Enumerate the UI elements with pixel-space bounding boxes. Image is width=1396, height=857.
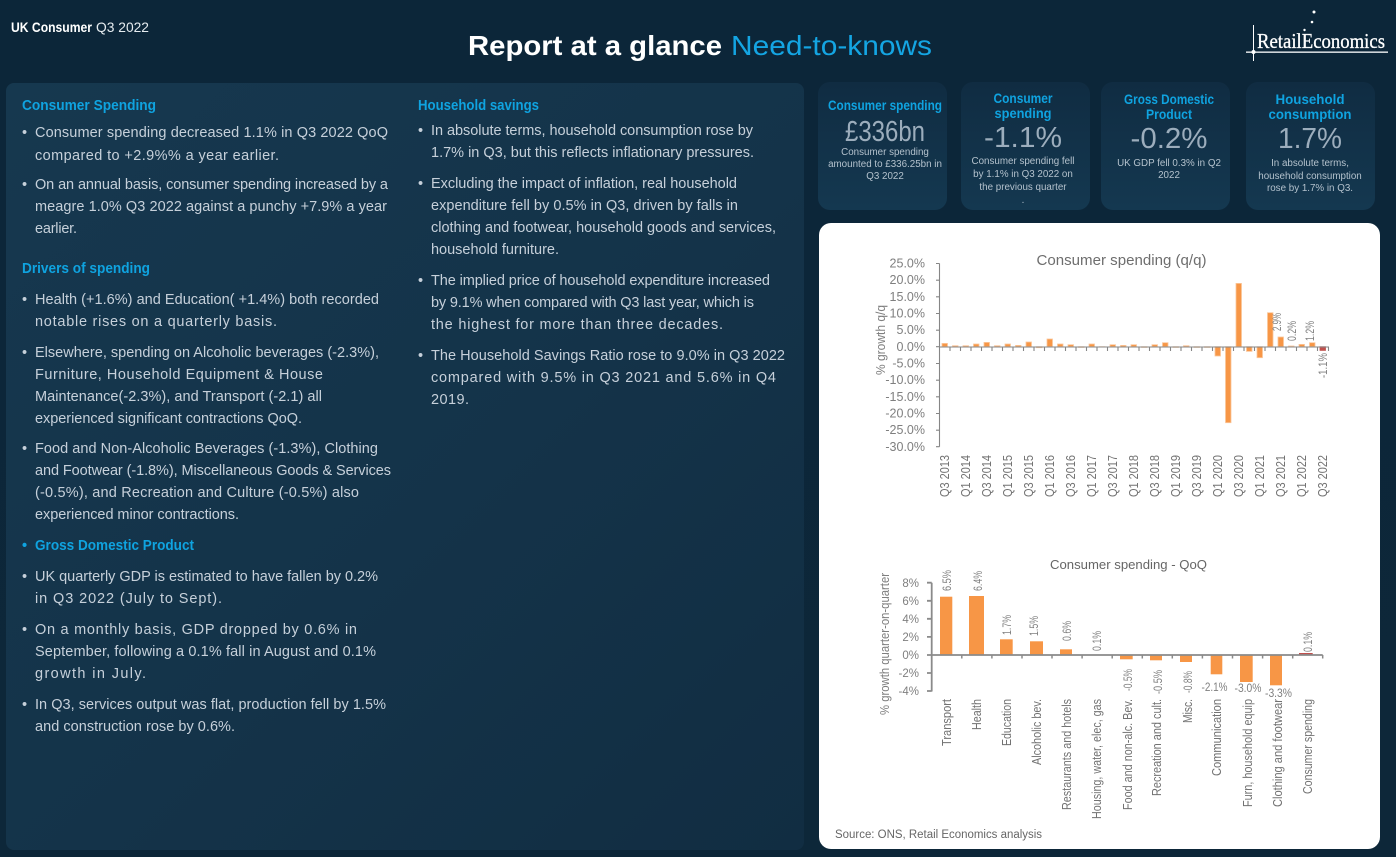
logo: Retail Economics: [1246, 10, 1388, 61]
data labels: 0.2%: [1285, 321, 1299, 341]
data labels: -0.8%: [1181, 671, 1195, 693]
heading: consumer spending: Consumer Spending: [22, 98, 156, 114]
text: spending quarterly: •: [22, 125, 27, 141]
y axis labels: -25.0%: [885, 423, 925, 437]
y axis title: % growth q/q: [873, 305, 888, 375]
y axis labels: 15.0%: [890, 290, 925, 304]
chart title: Consumer spending (q/q): [1036, 252, 1206, 269]
text: spending annual: •: [22, 177, 27, 193]
y axis labels: 0.0%: [896, 340, 925, 354]
card: household consumption: 1.7%: [1278, 123, 1342, 155]
axes: [936, 264, 1329, 447]
text: services output: In Q3, services output was flat, production fell by 1.5%: [35, 697, 386, 713]
card: consumer spending value: Q3 2022: [866, 171, 904, 182]
text: contractions: [22, 345, 379, 427]
text: services output: and construction rose by 0.6%.: [35, 719, 235, 735]
x axis labels: Q3 2018: [1147, 455, 1162, 497]
card: consumer spending growth: Consumer spending fell: [972, 156, 1074, 167]
data labels: 2.9%: [1270, 313, 1284, 331]
x axis labels: [937, 455, 1330, 497]
text: contractions: •: [22, 345, 27, 361]
text: health and education: •: [22, 292, 27, 308]
data labels: 1.7%: [1000, 615, 1014, 635]
text: savings ratio: •: [418, 348, 423, 364]
text: savings ratio: 2019.: [431, 392, 469, 408]
text: quarterly GDP: UK quarterly GDP is estimated to have fallen by 0.2%: [35, 569, 378, 585]
panel: charts: [819, 223, 1380, 849]
report label: [11, 19, 149, 35]
data labels: 1.2%: [1303, 321, 1317, 341]
card: household consumption: [1246, 82, 1375, 210]
text: quarterly GDP: •: [22, 569, 27, 585]
card: consumer spending value: [818, 82, 947, 210]
y axis labels: 2%: [902, 632, 919, 644]
card: consumer spending growth: the previous quarter: [979, 182, 1067, 193]
card: household consumption: In absolute terms,: [1271, 158, 1349, 169]
text: quarterly GDP: in Q3 2022 (July to Sept).: [35, 591, 222, 607]
category labels: Clothing and footwear: [1270, 698, 1285, 807]
text: implied price: [418, 273, 770, 333]
text: contractions: Maintenance(-2.3%), and Transport (-2.1) all: [35, 389, 322, 405]
y axis labels: 6%: [902, 596, 919, 608]
card: household consumption: rose by 1.7% in Q3.: [1267, 183, 1353, 194]
text: monthly GDP: September, following a 0.1% fall in August and 0.1%: [35, 644, 376, 660]
data labels: -3.0%: [1234, 681, 1262, 695]
card: GDP: [1101, 82, 1230, 210]
category labels: Furn, household equip: [1240, 699, 1255, 807]
x axis labels: Q3 2019: [1189, 455, 1204, 497]
text: absolute consumption: In absolute terms, household consumption rose by: [431, 123, 754, 139]
text: spending quarterly: compared to +2.9%% a year earlier.: [35, 148, 279, 164]
text: health and education: [22, 292, 379, 330]
title: Report at a glance: [468, 30, 722, 61]
y axis title: % growth quarter-on-quarter: [878, 573, 892, 715]
text: minor contractions: [22, 441, 391, 523]
text: real expenditure: Excluding the impact of inflation, real household: [431, 176, 737, 192]
card: consumer spending growth: [961, 82, 1090, 210]
text: minor contractions: Food and Non-Alcoholic Beverages (-1.3%), Clothing: [35, 441, 378, 457]
text: spending annual: earlier.: [35, 221, 77, 237]
title: [468, 30, 932, 61]
x axis labels: Q1 2014: [958, 455, 973, 497]
y axis labels: [899, 578, 919, 698]
y axis labels: -4%: [899, 686, 919, 698]
card: consumer spending growth: by 1.1% in Q3 2022 on: [973, 169, 1073, 180]
card: household consumption: consumption: [1268, 106, 1352, 122]
y axis labels: 8%: [902, 578, 919, 590]
text: monthly GDP: [22, 622, 376, 682]
heading: gross domestic product: •: [22, 538, 27, 554]
card: GDP: -0.2%: [1130, 123, 1208, 155]
card: household consumption: Household: [1276, 91, 1344, 107]
axes: [927, 583, 1323, 692]
category labels: Transport: [939, 699, 954, 746]
category labels: Recreation and cult.: [1149, 699, 1164, 796]
panel: report text: [6, 83, 804, 850]
title: Need-to-knows: [731, 30, 932, 61]
y axis labels: 20.0%: [890, 273, 925, 287]
category labels: Health: [969, 699, 984, 730]
y axis labels: 10.0%: [890, 306, 925, 320]
text: minor contractions: •: [22, 441, 27, 457]
card: consumer spending value: Consumer spending: [841, 147, 929, 158]
y axis labels: 0%: [902, 650, 919, 662]
data labels: -1.1%: [1316, 353, 1330, 378]
x axis labels: Q1 2017: [1084, 455, 1099, 497]
x axis labels: Q3 2016: [1063, 455, 1078, 497]
category labels: [939, 698, 1315, 819]
data labels: [1270, 313, 1330, 378]
text: contractions: experienced significant contractions QoQ.: [35, 411, 302, 427]
x axis labels: Q3 2020: [1231, 455, 1246, 497]
data labels: -2.1%: [1202, 680, 1228, 694]
card: consumer spending value: amounted to £336.25bn in: [828, 159, 942, 170]
category labels: Restaurants and hotels: [1059, 699, 1074, 810]
text: contractions: Furniture, Household Equipment & House: [35, 367, 323, 383]
data labels: 0.1%: [1301, 632, 1315, 652]
chart title: Consumer spending - QoQ: [1050, 557, 1207, 572]
card: consumer spending value: Consumer spending: [828, 97, 942, 113]
y axis labels: -5.0%: [892, 356, 925, 370]
text: savings ratio: [418, 348, 785, 408]
data labels: -3.3%: [1265, 686, 1292, 700]
y axis labels: -2%: [899, 668, 919, 680]
y axis labels: 25.0%: [890, 256, 925, 270]
x axis labels: Q3 2013: [937, 455, 952, 497]
text: implied price: the highest for more than three decades.: [431, 317, 723, 333]
x axis labels: Q1 2022: [1294, 455, 1309, 497]
data labels: [940, 570, 1315, 700]
text: spending annual: On an annual basis, consumer spending increased by a: [35, 177, 389, 193]
category labels: Alcoholic bev.: [1029, 699, 1044, 765]
x axis labels: Q1 2016: [1042, 455, 1057, 497]
category labels: Communication: [1209, 699, 1224, 776]
text: spending annual: [22, 177, 389, 237]
text: real expenditure: expenditure fell by 0.5% in Q3, driven by falls in: [431, 198, 738, 214]
text: absolute consumption: 1.7% in Q3, but this reflects inflationary pressures.: [431, 145, 754, 161]
source note: Source: ONS, Retail Economics analysis: [835, 829, 1042, 841]
card: consumer spending growth: Consumer: [994, 90, 1053, 106]
bars: [942, 283, 1326, 423]
x axis labels: Q1 2015: [1000, 455, 1015, 497]
text: services output: [22, 697, 386, 735]
y axis labels: -15.0%: [885, 390, 925, 404]
x axis labels: Q1 2020: [1210, 455, 1225, 497]
text: savings ratio: The Household Savings Ratio rose to 9.0% in Q3 2022: [431, 348, 785, 364]
card: GDP: UK GDP fell 0.3% in Q2: [1117, 158, 1221, 169]
text: implied price: by 9.1% when compared with Q3 last year, which is: [431, 295, 754, 311]
x axis labels: Q1 2021: [1252, 455, 1267, 497]
text: spending annual: meagre 1.0% Q3 2022 against a punchy +7.9% a year: [35, 199, 387, 215]
text: health and education: notable rises on a quarterly basis.: [35, 314, 277, 330]
text: monthly GDP: On a monthly basis, GDP dropped by 0.6% in: [35, 622, 357, 638]
text: absolute consumption: •: [418, 123, 423, 139]
text: minor contractions: (-0.5%), and Recreation and Culture (-0.5%) also: [35, 485, 359, 501]
x axis labels: Q1 2019: [1168, 455, 1183, 497]
bars: [940, 596, 1313, 685]
card: GDP: Product: [1146, 106, 1192, 122]
data labels: -0.5%: [1121, 669, 1135, 691]
card: consumer spending growth: spending: [994, 105, 1052, 121]
text: real expenditure: [418, 176, 776, 258]
data labels: 6.5%: [940, 570, 954, 591]
text: minor contractions: experienced minor contractions.: [35, 507, 239, 523]
card: consumer spending growth: -1.1%: [984, 122, 1062, 154]
chart: consumer spending QoQ by category: [878, 557, 1323, 819]
y axis labels: -20.0%: [885, 406, 925, 420]
chart: consumer spending q/q: [873, 252, 1330, 497]
report label: UK Consumer: [11, 19, 92, 35]
data labels: 1.5%: [1027, 616, 1041, 636]
text: monthly GDP: •: [22, 622, 27, 638]
card: household consumption: household consumption: [1258, 171, 1362, 182]
category labels: Food and non-alc. Bev.: [1120, 699, 1135, 810]
data labels: -0.5%: [1151, 670, 1165, 694]
y axis labels: 4%: [902, 614, 919, 626]
category labels: Housing, water, elec, gas: [1089, 699, 1104, 819]
y axis labels: -10.0%: [885, 373, 925, 387]
data labels: 0.1%: [1090, 631, 1104, 651]
text: quarterly GDP: [22, 569, 378, 607]
category labels: Education: [999, 699, 1014, 746]
x axis labels: Q1 2018: [1126, 455, 1141, 497]
card: consumer spending value: £336bn: [845, 116, 925, 148]
text: minor contractions: and Footwear (-1.8%), Miscellaneous Goods & Services: [35, 463, 391, 479]
text: monthly GDP: growth in July.: [35, 666, 146, 682]
heading: household savings: Household savings: [418, 98, 539, 114]
text: spending quarterly: [22, 125, 388, 164]
category labels: Misc.: [1180, 699, 1195, 723]
category labels: Consumer spending: [1300, 699, 1315, 794]
text: health and education: Health (+1.6%) and Education( +1.4%) both recorded: [35, 292, 379, 308]
text: real expenditure: household furniture.: [431, 242, 559, 258]
text: absolute consumption: [418, 123, 754, 161]
x axis labels: Q3 2014: [979, 455, 994, 497]
report label: Q3 2022: [96, 19, 149, 35]
x axis labels: Q3 2021: [1273, 455, 1288, 497]
y axis labels: [885, 256, 925, 454]
heading: drivers of spending: Drivers of spending: [22, 261, 150, 277]
text: services output: •: [22, 697, 27, 713]
y axis labels: 5.0%: [896, 323, 925, 337]
data labels: 0.6%: [1060, 621, 1074, 641]
x axis labels: Q3 2017: [1105, 455, 1120, 497]
text: spending quarterly: Consumer spending decreased 1.1% in Q3 2022 QoQ: [35, 125, 388, 141]
text: implied price: The implied price of household expenditure increased: [431, 273, 770, 289]
card: GDP: 2022: [1158, 170, 1180, 181]
data labels: 6.4%: [971, 571, 985, 591]
x axis labels: Q3 2022: [1315, 455, 1330, 497]
card: GDP: Gross Domestic: [1124, 91, 1214, 107]
y axis labels: -30.0%: [885, 440, 925, 454]
x axis labels: Q3 2015: [1021, 455, 1036, 497]
card: consumer spending growth: .: [1022, 195, 1024, 206]
text: savings ratio: compared with 9.5% in Q3 2021 and 5.6% in Q4: [431, 370, 776, 386]
text: real expenditure: clothing and footwear, household goods and services,: [431, 220, 776, 236]
text: contractions: Elsewhere, spending on Alcoholic beverages (-2.3%),: [35, 345, 379, 361]
text: real expenditure: •: [418, 176, 423, 192]
heading: gross domestic product: Gross Domestic Product: [35, 538, 194, 554]
text: implied price: •: [418, 273, 423, 289]
